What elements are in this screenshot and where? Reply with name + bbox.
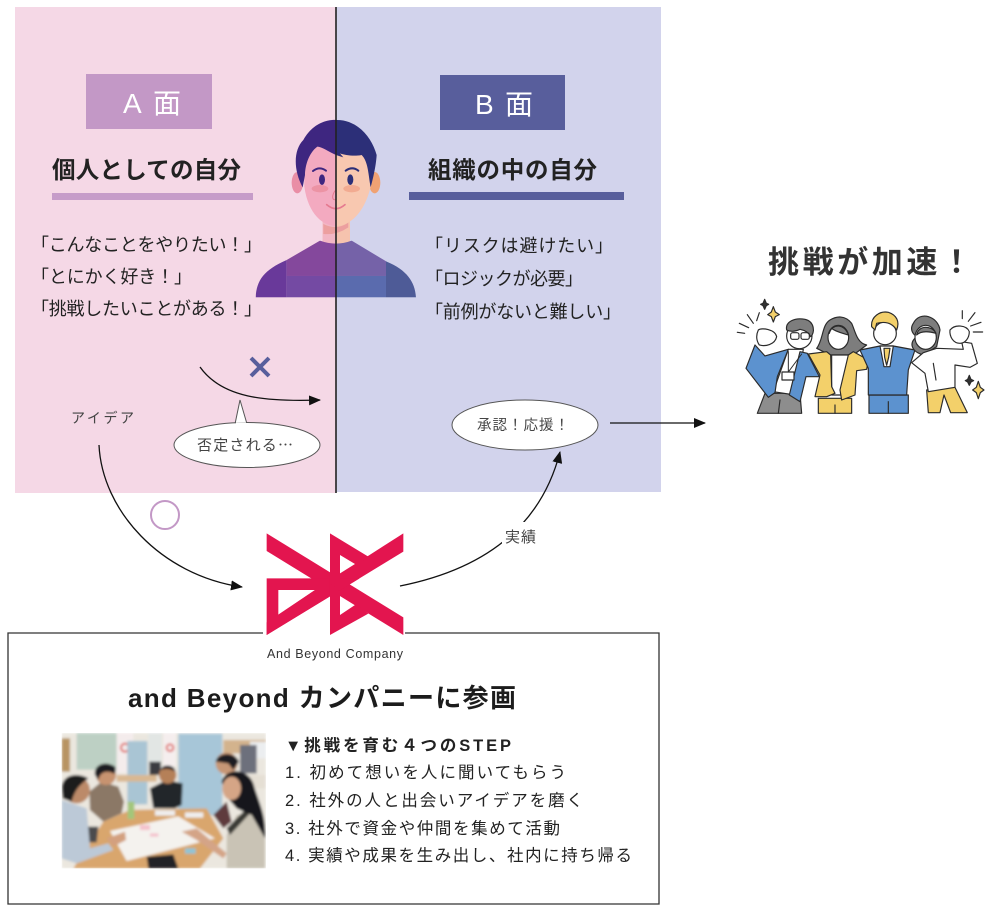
heading: 組織の中の自分 [409,157,624,200]
text block: A side quotes: 「こんなことをやりたい！」 [31,235,262,255]
speech bubble: 否定される [174,400,320,468]
label box: B面 [440,75,565,130]
text block: four steps: 2. 社外の人と出会いアイデアを磨く [285,790,583,810]
photo: workshop table [62,733,266,868]
person 2 [808,317,868,413]
person 3 [860,312,915,413]
arrow: idea rejected [200,367,320,400]
label box: A面: A 面 [123,88,181,119]
heading: 個人としての自分 [52,157,253,200]
heading: 挑戦が加速: 挑戦が加速！ [768,245,972,280]
text block: four steps: 3. 社外で資金や仲間を集めて活動 [285,819,560,838]
heading: 個人としての自分: 個人としての自分 [52,157,242,183]
text block: B side quotes: 「前例がないと難しい」 [425,302,621,322]
text block: four steps: 4. 実績や成果を生み出し、社内に持ち帰る [285,846,632,865]
icon: person half and half [253,120,419,300]
heading: and Beyond カンパニーに参画: and Beyond カンパニーに参画 [128,683,516,713]
sparkles left [737,299,779,333]
text block: A side quotes [31,235,262,319]
text block: A side quotes: 「挑戦したいことがある！」 [31,299,262,319]
heading: 組織の中の自分: 組織の中の自分 [428,157,598,183]
speech bubble: 承認！応援！ [452,400,598,450]
icon: cross mark [251,358,269,376]
text block: four steps: 1. 初めて想いを人に聞いてもらう [285,763,566,782]
person 1 [746,319,819,413]
text block: B side quotes [425,236,621,322]
logo: And Beyond Company: And Beyond Company [267,647,404,661]
sparkles right [962,311,984,399]
label: 実績 [502,522,540,549]
panel: A side background [15,7,336,493]
speech bubble: 承認！応援！: 承認！応援！ [477,417,569,434]
center divider line [335,7,337,493]
illustration: team celebrating [737,299,984,413]
text block: four steps [285,735,632,865]
label box: B面: B 面 [475,89,533,120]
text block: four steps: ▼挑戦を育む４つのSTEP [285,735,511,755]
icon: circle mark [151,501,179,529]
arrow: idea to and Beyond [99,445,242,587]
text block: B side quotes: 「ロジックが必要」 [425,269,583,289]
panel: B side background [336,7,661,492]
label: アイデア: アイデア [71,410,134,426]
frame: and Beyond panel [8,633,659,904]
label box: A面 [86,74,212,129]
logo: And Beyond Company [267,533,404,661]
label: 実績: 実績 [505,529,536,546]
arrow: results to approval [400,452,560,586]
arrow: to challenge accelerates [610,422,705,424]
person 4 [912,316,977,413]
text block: A side quotes: 「とにかく好き！」 [31,267,192,287]
speech bubble: 否定される: 否定される… [197,434,293,455]
text block: B side quotes: 「リスクは避けたい」 [425,236,613,256]
